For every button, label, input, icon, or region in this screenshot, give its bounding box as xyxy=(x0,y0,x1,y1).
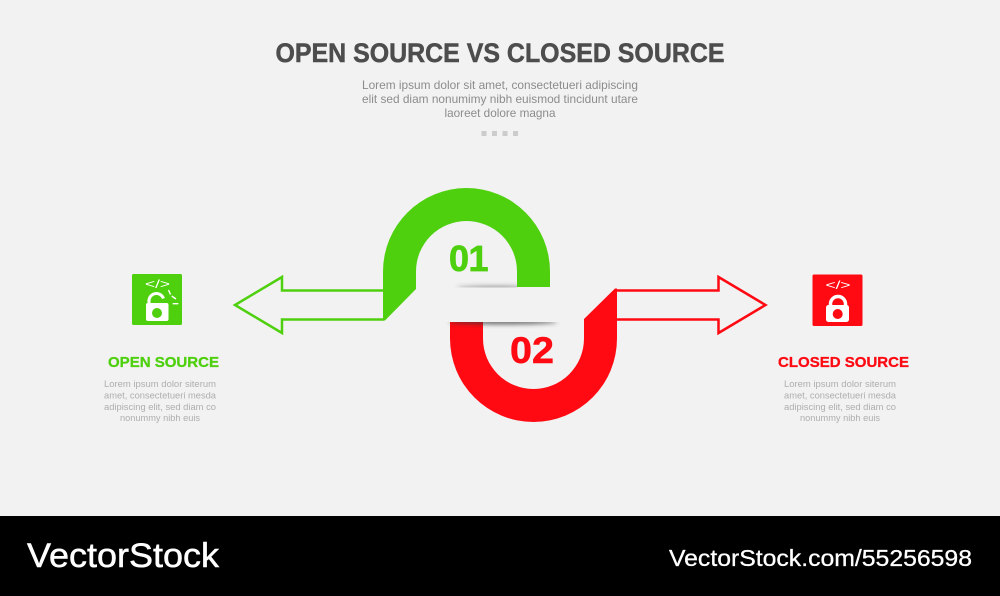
description: closed source xyxy=(784,379,896,423)
title: OPEN SOURCE VS CLOSED SOURCE xyxy=(276,38,724,68)
subtitle text xyxy=(362,78,638,120)
description: open source: amet, consectetueri mesda xyxy=(104,390,216,400)
description: closed source: Lorem ipsum dolor siterum xyxy=(784,379,896,389)
divider dots xyxy=(482,131,518,136)
description: open source xyxy=(104,379,216,423)
green arch xyxy=(383,188,550,320)
description: open source: adipiscing elit, sed diam co xyxy=(104,402,216,412)
footer bar xyxy=(0,516,1000,596)
description: open source: nonummy nibh euis xyxy=(120,413,201,423)
subtitle text: elit sed diam nonumimy nibh euismod tincidunt utare xyxy=(362,92,638,106)
heading: closed source: CLOSED SOURCE xyxy=(778,354,909,371)
icon: closed padlock: </> xyxy=(826,278,850,292)
arrow: left green outline xyxy=(235,277,384,333)
number 01: 1 xyxy=(468,238,489,279)
description: closed source: amet, consectetueri mesda xyxy=(784,390,896,400)
description: open source: Lorem ipsum dolor siterum xyxy=(104,379,216,389)
heading: open source: OPEN SOURCE xyxy=(108,354,219,371)
icon: open padlock: </> xyxy=(145,277,170,291)
number 01: 0 xyxy=(449,238,469,279)
number 02: 02 xyxy=(510,330,554,371)
red arch xyxy=(450,288,617,422)
subtitle text: laoreet dolore magna xyxy=(444,106,556,120)
subtitle text: Lorem ipsum dolor sit amet, consectetueri adipiscing xyxy=(362,78,638,92)
icon: open padlock xyxy=(132,274,182,325)
footer bar: VectorStock.com/55256598 xyxy=(669,545,972,571)
icon: closed padlock xyxy=(812,274,862,326)
shadow: below band xyxy=(449,320,557,324)
shadow: above band xyxy=(457,286,533,289)
arrow: right red outline xyxy=(616,277,766,333)
description: closed source: adipiscing elit, sed diam co xyxy=(784,402,896,412)
footer bar: VectorStock xyxy=(27,537,220,575)
description: closed source: nonummy nibh euis xyxy=(800,413,881,423)
